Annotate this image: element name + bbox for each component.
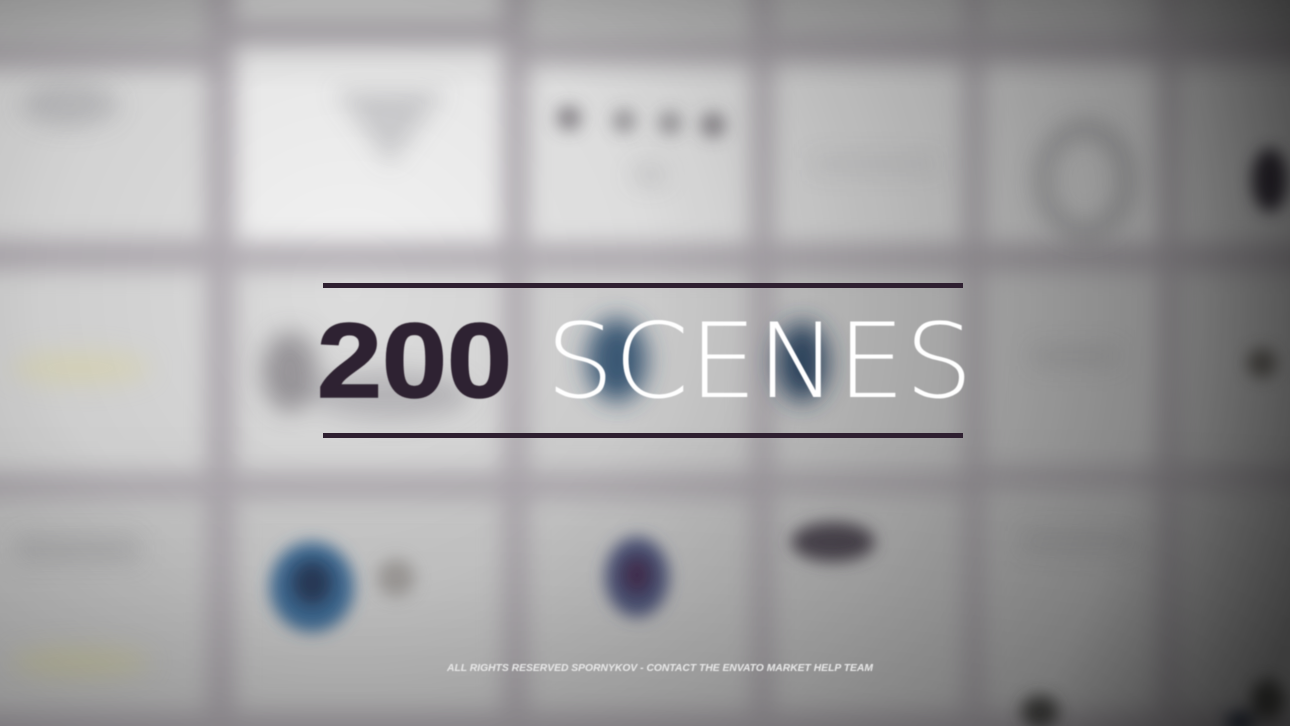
title: 200 SCENES: [317, 302, 973, 422]
scenes word: SCENES: [546, 302, 973, 422]
copyright line: ALL RIGHTS RESERVED SPORNYKOV - CONTACT THE ENVATO MARKET HELP TEAM: [446, 662, 873, 674]
bold count: 200: [317, 302, 512, 420]
bottom rule: [323, 433, 963, 438]
top rule: [323, 283, 963, 288]
